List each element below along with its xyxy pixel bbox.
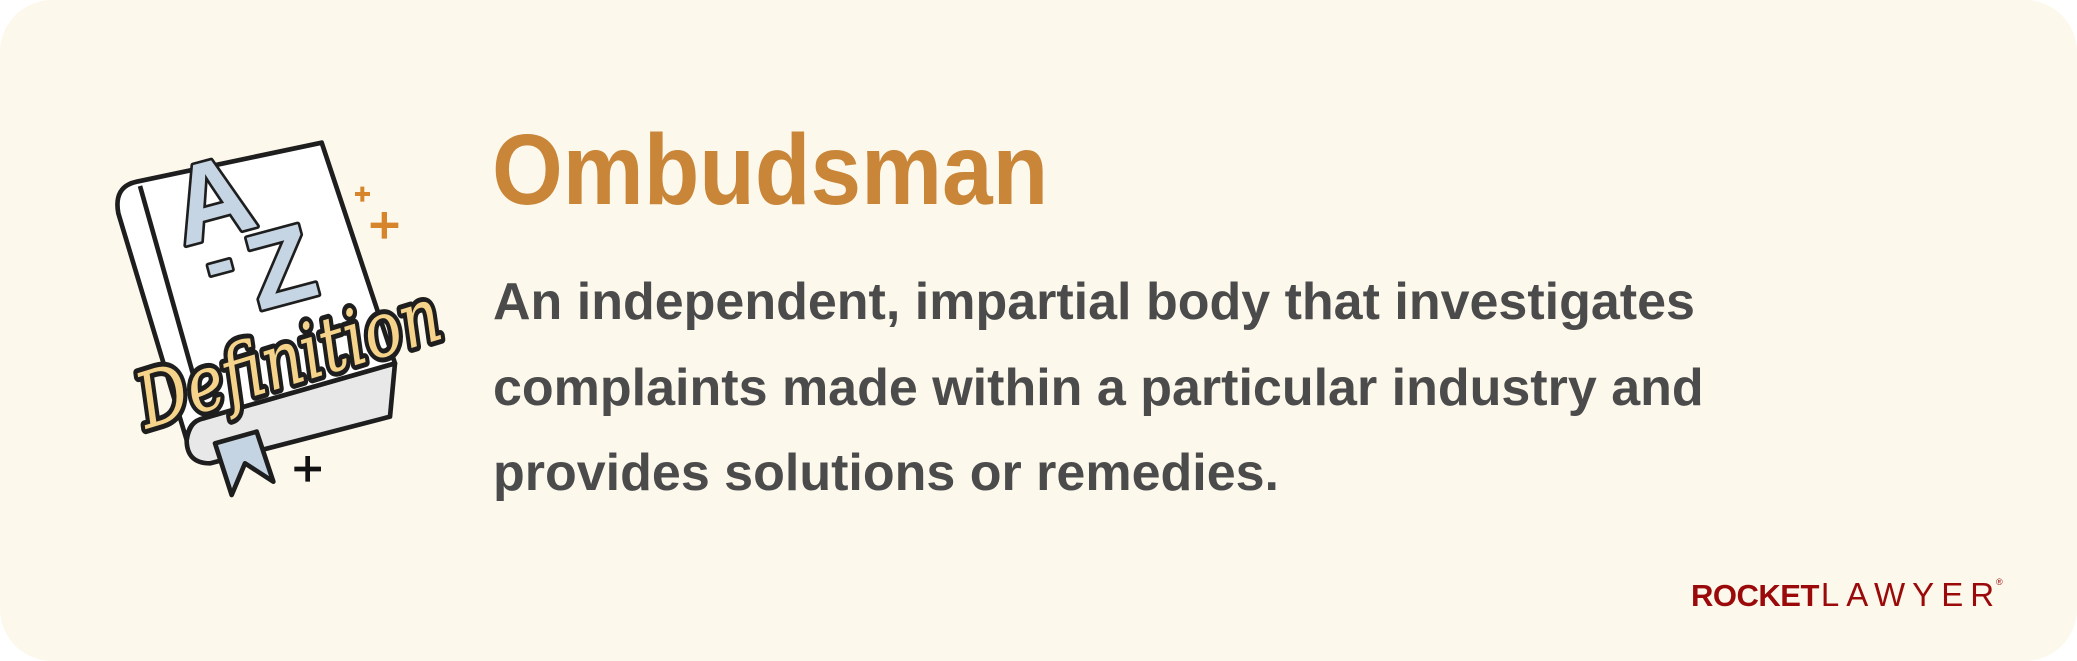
sparkles: [294, 187, 398, 482]
definition text: complaints made within a particular industry and: [493, 358, 1704, 416]
definition text: provides solutions or remedies.: [493, 444, 1279, 502]
bookmark: [215, 432, 273, 495]
letters A-Z: A: [158, 130, 266, 269]
icon: definition book: [115, 130, 450, 498]
letters A-Z: Z: [234, 200, 328, 333]
page block: [187, 363, 395, 463]
book cover: [117, 143, 395, 440]
logo: Rocket Lawyer: ROCKETLAWYER®: [1691, 576, 2003, 613]
letters A-Z: [158, 130, 328, 333]
definition text: [493, 273, 1704, 502]
title: Ombudsman: [492, 114, 1048, 226]
definition text: An independent, impartial body that investigates: [493, 273, 1695, 331]
letters A-Z: -: [192, 211, 245, 311]
